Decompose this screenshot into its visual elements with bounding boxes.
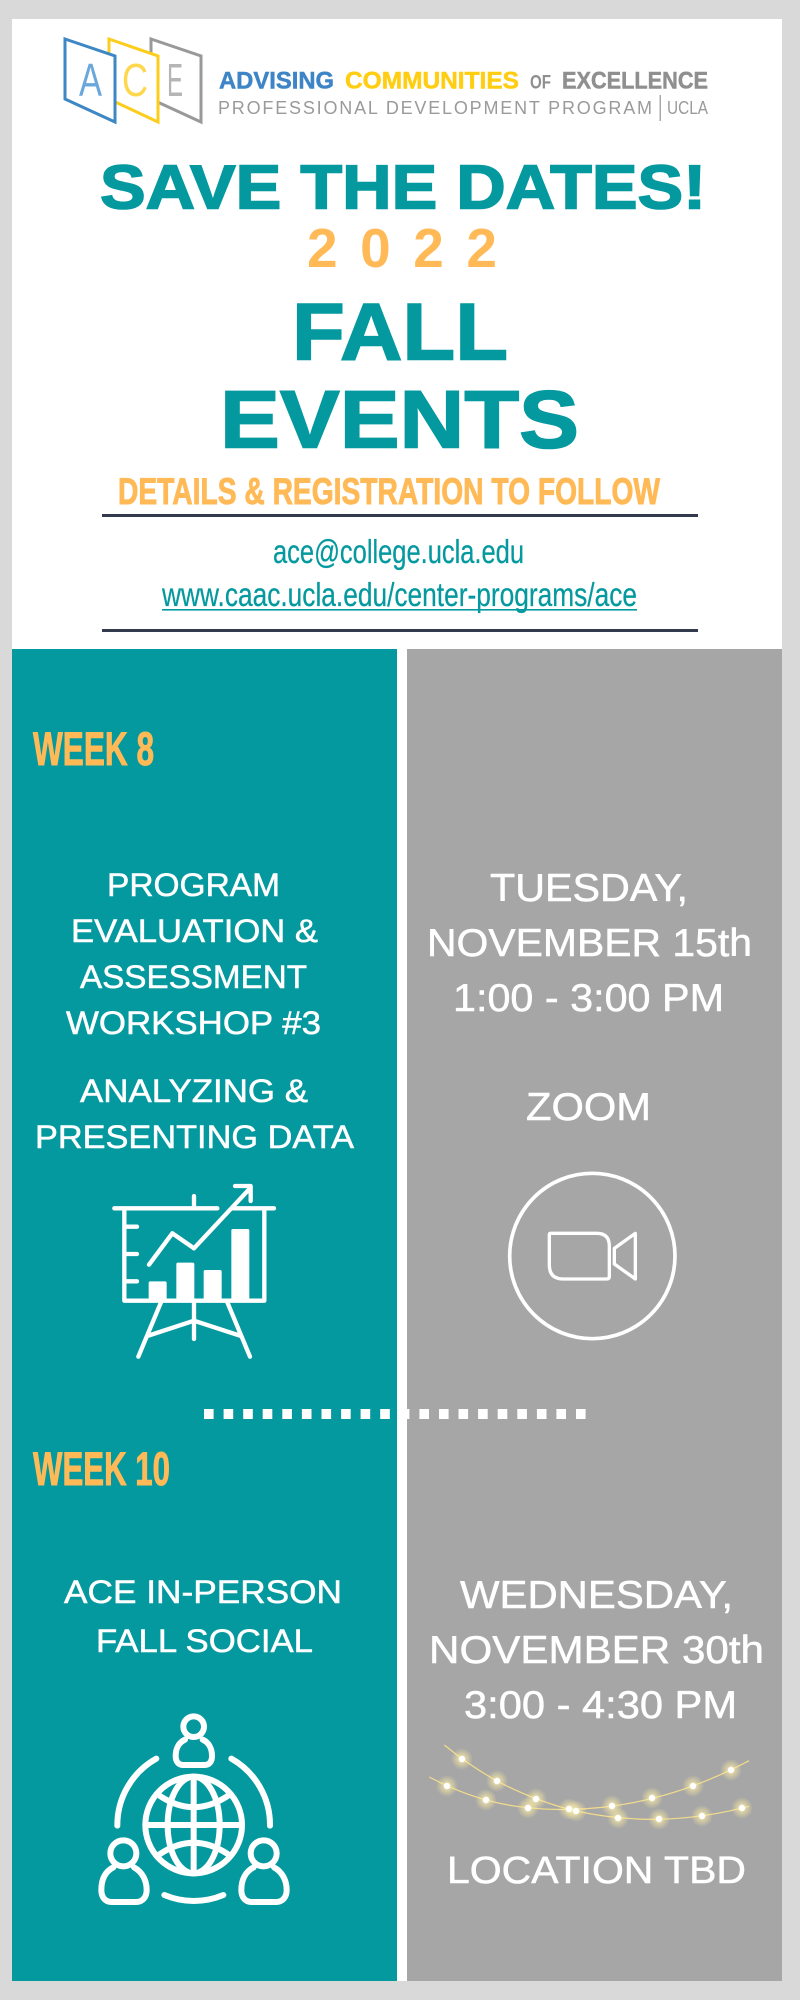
year: 2022 [307, 217, 497, 279]
text: week 8 date and time: TUESDAY, [490, 867, 688, 910]
text: social title: FALL SOCIAL [96, 1623, 313, 1659]
logo wordmark: ADVISING [219, 68, 334, 94]
logo wordmark: PROFESSIONAL DEVELOPMENT PROGRAM [218, 98, 652, 118]
logo wordmark [218, 68, 708, 121]
title: save the dates: SAVE THE DATES! [100, 154, 706, 222]
text: social title [64, 1574, 342, 1659]
text: week 8 date and time: 1:00 - 3:00 PM [453, 977, 724, 1020]
title: fall: FALL [292, 288, 508, 378]
icon: ACE overlapping frames: A [79, 54, 102, 106]
icon: presentation chart [114, 1186, 274, 1357]
icon: ACE overlapping frames: C [122, 54, 148, 106]
text: workshop title: ASSESSMENT [80, 959, 307, 995]
text: week 8 date and time: NOVEMBER 15th [427, 922, 752, 965]
icon: people around globe [101, 1716, 287, 1902]
text: zoom location: ZOOM [526, 1086, 651, 1129]
heading: week 10: WEEK 10 [33, 1442, 170, 1495]
text: workshop subtitle [35, 1073, 355, 1155]
text: workshop title: WORKSHOP #3 [66, 1005, 321, 1041]
icon: zoom video camera [510, 1173, 675, 1339]
icon: ACE overlapping frames [65, 39, 201, 122]
logo wordmark: OF [530, 72, 551, 94]
icon: ACE overlapping frames: E [167, 54, 183, 106]
text: social title: ACE IN-PERSON [64, 1574, 342, 1610]
text: workshop title [66, 867, 321, 1041]
panel: header [12, 19, 782, 649]
text: workshop title: PROGRAM [107, 867, 280, 903]
text: workshop subtitle: PRESENTING DATA [35, 1119, 355, 1155]
logo wordmark: COMMUNITIES [345, 68, 519, 94]
contact email: ace@college.ucla.edu [273, 533, 524, 570]
panel: event times and places [407, 649, 782, 1981]
text: workshop title: EVALUATION & [71, 913, 318, 949]
contact website: www.caac.ucla.edu/center-programs/ace [161, 576, 637, 613]
text: week 10 date and time: WEDNESDAY, [460, 1574, 733, 1617]
title: events: EVENTS [220, 374, 579, 466]
logo: ACE [65, 39, 708, 122]
heading: week 8: WEEK 8 [33, 722, 154, 775]
logo wordmark: EXCELLENCE [562, 68, 708, 94]
text: week 10 date and time: NOVEMBER 30th [429, 1629, 764, 1672]
logo wordmark: UCLA [667, 98, 708, 118]
text: location tbd: LOCATION TBD [447, 1850, 746, 1892]
text: week 10 date and time: 3:00 - 4:30 PM [464, 1684, 737, 1727]
text: workshop subtitle: ANALYZING & [80, 1073, 308, 1109]
panel: event topics [12, 649, 397, 1981]
text: week 10 date and time [429, 1574, 764, 1727]
icon: string lights [429, 1745, 753, 1830]
text: week 8 date and time [427, 867, 752, 1020]
